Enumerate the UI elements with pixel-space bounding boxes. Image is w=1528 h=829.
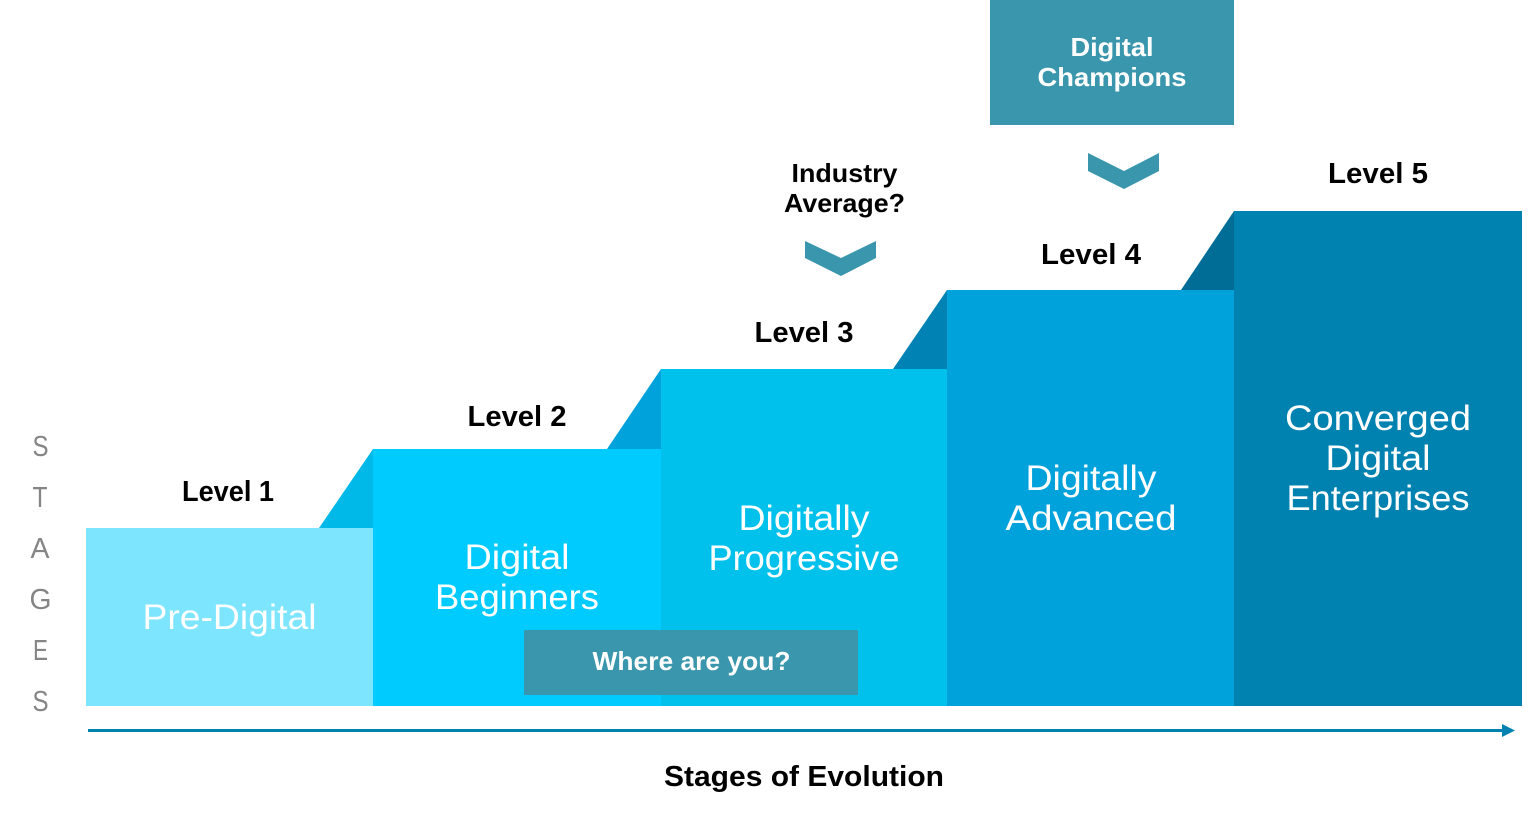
step 1: Pre-Digital (86, 449, 373, 706)
vertical label: STAGES: A (30, 533, 50, 565)
text: Industry Average?: Industry (792, 158, 898, 188)
text: Industry Average?: Average? (784, 188, 905, 218)
heading: Level 5: Level 5 (1328, 158, 1428, 190)
vertical label: STAGES: T (32, 482, 48, 514)
heading: Level 4: Level 4 (1041, 239, 1141, 271)
callout: Where are you?: Where are you? (592, 646, 790, 676)
vertical label: STAGES: G (30, 584, 52, 616)
step 5: Converged Digital Enterprises: Converged (1285, 399, 1471, 438)
step 5: Converged Digital Enterprises (1234, 211, 1522, 706)
icon: chevron down under Industry Average (805, 241, 876, 276)
arrow: evolution axis (88, 724, 1515, 737)
icon: chevron down under Digital Champions (1088, 153, 1159, 189)
callout: Digital Champions (990, 0, 1234, 125)
step 1: Pre-Digital: Pre-Digital (142, 598, 316, 637)
vertical label: STAGES: S (32, 431, 48, 463)
callout: Digital Champions: Champions (1038, 62, 1186, 92)
vertical label: STAGES: S (32, 686, 48, 718)
step 3: Digitally Progressive: Progressive (708, 539, 900, 578)
axis label: Stages of Evolution: Stages of Evolution (664, 761, 944, 793)
step 4: Digitally Advanced: Digitally (1026, 459, 1157, 498)
heading: Level 1: Level 1 (182, 476, 274, 508)
step 2: Digital Beginners: Beginners (435, 578, 599, 617)
step 5: Converged Digital Enterprises: Enterprises (1286, 479, 1470, 518)
step 5: Converged Digital Enterprises: Digital (1326, 439, 1430, 478)
text: Industry Average? (784, 158, 905, 218)
step 2: Digital Beginners: Digital (464, 538, 570, 577)
step 3: Digitally Progressive: Digitally (738, 499, 870, 538)
step 3: Digitally Progressive (661, 290, 947, 706)
step 4: Digitally Advanced: Advanced (1006, 499, 1176, 538)
step 4: Digitally Advanced (947, 211, 1234, 706)
vertical label: STAGES (30, 431, 52, 718)
heading: Level 3: Level 3 (754, 317, 854, 349)
callout: Where are you? (524, 630, 858, 695)
callout: Digital Champions: Digital (1070, 32, 1154, 62)
vertical label: STAGES: E (33, 635, 48, 667)
step 2: Digital Beginners (373, 369, 661, 706)
heading: Level 2: Level 2 (468, 401, 566, 433)
